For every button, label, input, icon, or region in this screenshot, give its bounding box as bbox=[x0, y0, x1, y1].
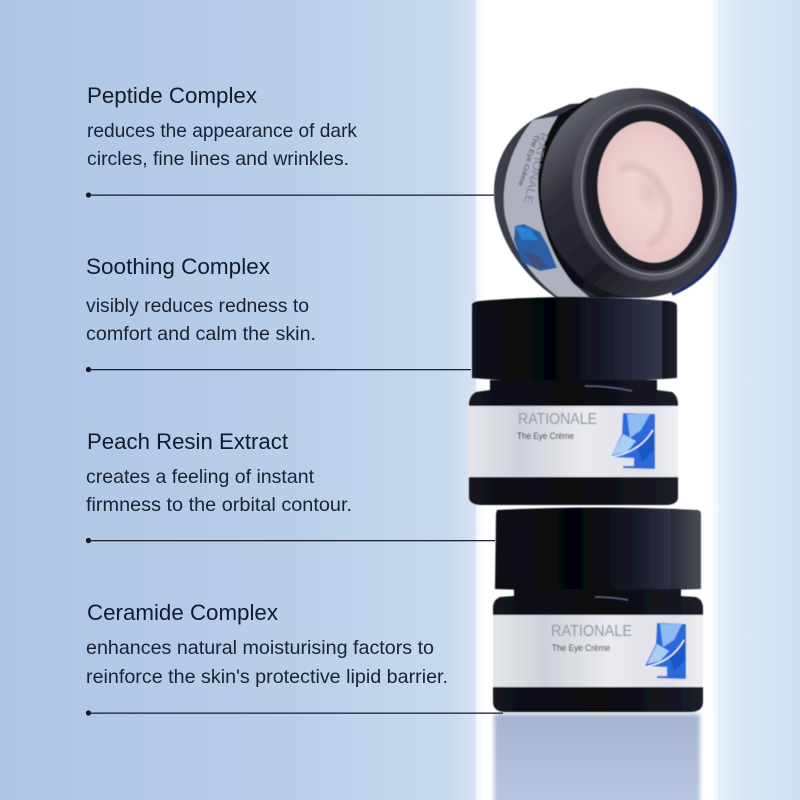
label text: brand: RATIONALE bbox=[521, 131, 550, 205]
ingredient: Soothing Complex bbox=[86, 254, 471, 372]
description bbox=[86, 295, 316, 345]
cream swirl bbox=[620, 166, 668, 246]
label icon bbox=[514, 224, 557, 271]
ingredient: Ceramide Complex bbox=[86, 600, 503, 716]
pink cream bbox=[589, 114, 711, 270]
product: tilted open jar bbox=[494, 76, 749, 310]
product name: The Eye Crème bbox=[552, 643, 610, 654]
glass body bbox=[469, 380, 678, 505]
leader line to jar bbox=[86, 192, 494, 198]
description: reduces the appearance of dark bbox=[87, 120, 357, 142]
lid bbox=[472, 297, 677, 382]
heading: Peach Resin Extract bbox=[87, 429, 288, 454]
label icon: blue 4 bbox=[611, 413, 655, 469]
description: firmness to the orbital contour. bbox=[86, 494, 352, 516]
brand name: RATIONALE bbox=[518, 411, 597, 428]
ingredient: Peach Resin Extract bbox=[86, 429, 495, 543]
lid bbox=[495, 508, 701, 591]
description: visibly reduces redness to bbox=[86, 295, 309, 317]
description: comfort and calm the skin. bbox=[86, 323, 316, 345]
leader line to jar bbox=[86, 367, 471, 372]
description bbox=[86, 466, 352, 516]
ingredient: Peptide Complex bbox=[86, 83, 494, 198]
product: bottom jar bbox=[493, 508, 703, 712]
description bbox=[87, 120, 357, 170]
label band bbox=[493, 615, 703, 687]
brand name: RATIONALE bbox=[551, 623, 632, 640]
description: reinforce the skin's protective lipid barrier. bbox=[86, 666, 448, 688]
product: middle jar bbox=[468, 297, 678, 505]
label icon: blue 4 bbox=[645, 623, 686, 679]
heading: Soothing Complex bbox=[86, 254, 270, 279]
inner glass ring bbox=[561, 89, 735, 291]
label band bbox=[468, 406, 678, 477]
description: circles, fine lines and wrinkles. bbox=[87, 148, 349, 170]
glass rim bbox=[527, 76, 749, 310]
heading: Peptide Complex bbox=[87, 83, 257, 108]
glass body bbox=[493, 589, 703, 712]
description bbox=[86, 637, 448, 688]
jar body with label bbox=[494, 98, 640, 298]
product name: The Eye Crème bbox=[517, 431, 574, 442]
leader line to jar bbox=[86, 710, 503, 716]
heading: Ceramide Complex bbox=[87, 600, 278, 625]
description: creates a feeling of instant bbox=[86, 466, 315, 488]
label text: product name: The Eye Crème bbox=[516, 133, 540, 187]
leader line to jar bbox=[86, 538, 495, 543]
description: enhances natural moisturising factors to bbox=[86, 637, 434, 659]
